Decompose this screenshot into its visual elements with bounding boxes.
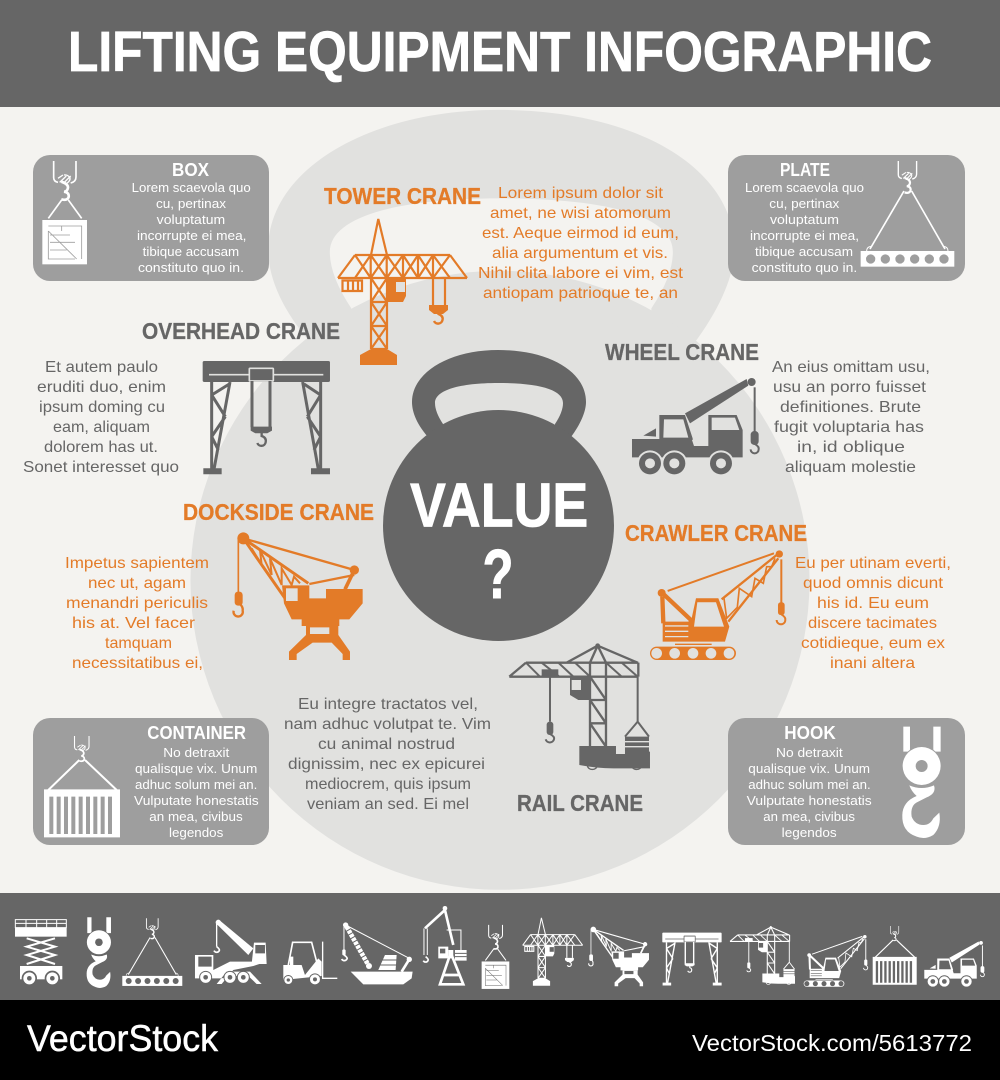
- crawler crane text: discere tacimates: [808, 615, 937, 632]
- hook text: legendos: [782, 825, 837, 840]
- dockside crane text: Impetus sapientem: [65, 555, 209, 572]
- hook text: qualisque vix. Unum: [748, 761, 870, 776]
- overhead crane text: eruditi duo, enim: [37, 379, 166, 396]
- panel: plate: [728, 155, 965, 281]
- plate text: incorrupte ei mea,: [750, 228, 859, 243]
- panel: box: [33, 155, 269, 281]
- wheel crane text: aliquam molestie: [785, 459, 916, 476]
- hook text: [747, 745, 872, 840]
- dockside crane text: tamquam: [105, 635, 172, 652]
- container text: an mea, civibus: [149, 809, 243, 824]
- plate text: constituto quo in.: [752, 260, 857, 275]
- wheel crane text: usu an porro fuisset: [773, 379, 927, 396]
- box text: cu, pertinax: [156, 196, 227, 211]
- dockside crane heading: DOCKSIDE CRANE: [183, 499, 374, 525]
- icon: rail crane: [730, 926, 795, 984]
- central kettlebell weight: [383, 350, 614, 641]
- rail crane heading: RAIL CRANE: [517, 790, 643, 816]
- overhead crane text: [23, 359, 179, 476]
- wheel crane text: fugit voluptaria has: [774, 419, 924, 436]
- container heading: CONTAINER: [147, 723, 246, 743]
- panel: container: [33, 718, 269, 845]
- hook text: an mea, civibus: [763, 809, 856, 824]
- rail crane text: mediocrem, quis ipsum: [305, 776, 471, 793]
- wheel crane heading: WHEEL CRANE: [605, 339, 759, 365]
- icon: dockside crane: [589, 927, 649, 986]
- tower crane text: alia argumentum et vis.: [492, 245, 668, 262]
- container text: legendos: [169, 825, 224, 840]
- dockside crane text: nec ut, agam: [88, 575, 186, 592]
- dockside crane text: his at. Vel facer: [72, 615, 196, 632]
- box text: voluptatum: [157, 212, 225, 227]
- icon: wheel crane: [632, 378, 759, 476]
- icon: dockside crane: [233, 532, 363, 660]
- overhead crane heading: OVERHEAD CRANE: [142, 318, 340, 344]
- box text: constituto quo in.: [138, 260, 244, 275]
- box text: [132, 180, 251, 275]
- tower crane text: [478, 185, 684, 302]
- hook heading: HOOK: [784, 723, 836, 743]
- tower crane text: est. Aeque eirmod id eum,: [482, 225, 679, 242]
- icon: wheel crane: [924, 941, 984, 988]
- plate text: tibique accusam: [755, 244, 853, 259]
- hook text: Vulputate honestatis: [747, 793, 872, 808]
- tower crane text: antiopam patrioque te, an: [483, 285, 678, 302]
- value label: VALUE: [410, 472, 588, 541]
- footer band: [0, 1000, 1000, 1080]
- plate text: voluptatum: [770, 212, 839, 227]
- overhead crane text: ipsum doming cu: [39, 399, 165, 416]
- wheel crane text: definitiones. Brute: [780, 399, 921, 416]
- question mark: ?: [482, 535, 514, 613]
- crawler crane text: his id. Eu eum: [817, 595, 929, 612]
- icon: truck crane: [195, 920, 267, 984]
- crawler crane heading: CRAWLER CRANE: [625, 520, 807, 546]
- crawler crane text: Eu per utinam everti,: [795, 555, 951, 572]
- tower crane heading: TOWER CRANE: [324, 183, 481, 209]
- box text: tibique accusam: [143, 244, 239, 259]
- hook text: No detraxit: [776, 745, 843, 760]
- tower crane text: Lorem ipsum dolor sit: [498, 185, 664, 202]
- background kettlebell silhouette: [190, 110, 810, 890]
- container text: Vulputate honestatis: [134, 793, 259, 808]
- icon: plate on hook: [861, 161, 954, 267]
- container text: qualisque vix. Unum: [135, 761, 257, 776]
- rail crane text: cu animal nostrud: [318, 736, 455, 753]
- icon: forklift: [283, 942, 337, 985]
- overhead crane text: eam, aliquam: [53, 419, 150, 436]
- icon: overhead crane: [662, 933, 722, 985]
- crawler crane text: [795, 555, 951, 672]
- tower crane text: Nihil clita labore ei vim, est: [478, 265, 684, 282]
- rail crane text: [284, 696, 491, 813]
- dockside crane text: [65, 555, 209, 672]
- crawler crane text: quod omnis dicunt: [803, 575, 944, 592]
- panel: hook: [728, 718, 965, 845]
- plate heading: PLATE: [780, 160, 830, 180]
- dockside crane text: necessitatibus ei,: [72, 655, 203, 672]
- icon: hook: [902, 727, 942, 838]
- title band: [0, 0, 1000, 107]
- icon: overhead crane: [203, 361, 330, 474]
- icon: plate on hook: [122, 918, 182, 986]
- plate text: [745, 180, 864, 275]
- footer url: VectorStock.com/5613772: [692, 1030, 972, 1056]
- dockside crane text: menandri periculis: [66, 595, 208, 612]
- plate text: cu, pertinax: [769, 196, 840, 211]
- tower crane text: amet, ne wisi atomorum: [490, 205, 671, 222]
- icon: crawler crane: [804, 935, 868, 987]
- rail crane text: Eu integre tractatos vel,: [298, 696, 478, 713]
- icon: box on hook: [42, 161, 87, 264]
- rail crane text: nam adhuc volutpat te. Vim: [284, 716, 491, 733]
- wheel crane text: in, id oblique: [797, 439, 905, 456]
- icon: scissor lift: [15, 920, 67, 986]
- box text: Lorem scaevola quo: [132, 180, 251, 195]
- container text: No detraxit: [163, 745, 230, 760]
- icon: container on hook: [873, 926, 917, 985]
- icon: portal crane: [423, 906, 467, 984]
- icon: ship crane: [342, 922, 413, 984]
- icon: rail crane: [509, 643, 650, 769]
- rail crane text: veniam an sed. Ei mel: [307, 796, 469, 813]
- icon: tower crane: [338, 219, 467, 365]
- icon strip band: [0, 893, 1000, 1000]
- rail crane text: dignissim, nec ex epicurei: [288, 756, 485, 773]
- overhead crane text: Sonet interesset quo: [23, 459, 179, 476]
- crawler crane text: cotidieque, eum ex: [801, 635, 945, 652]
- icon: box on hook: [482, 925, 509, 989]
- container text: adhuc solum mei an.: [135, 777, 257, 792]
- icon: hook: [86, 917, 112, 988]
- icon: crawler crane: [650, 550, 785, 660]
- box text: incorrupte ei mea,: [137, 228, 246, 243]
- plate text: Lorem scaevola quo: [745, 180, 864, 195]
- box heading: BOX: [172, 160, 209, 180]
- crawler crane text: inani altera: [830, 655, 915, 672]
- overhead crane text: dolorem has ut.: [44, 439, 158, 456]
- overhead crane text: Et autem paulo: [45, 359, 158, 376]
- hook text: adhuc solum mei an.: [748, 777, 871, 792]
- wheel crane text: An eius omittam usu,: [772, 359, 930, 376]
- icon: tower crane: [523, 918, 583, 986]
- icon: container on hook: [44, 736, 120, 837]
- wheel crane text: [772, 359, 930, 476]
- container text: [134, 745, 259, 840]
- footer logo: VectorStock: [27, 1018, 218, 1059]
